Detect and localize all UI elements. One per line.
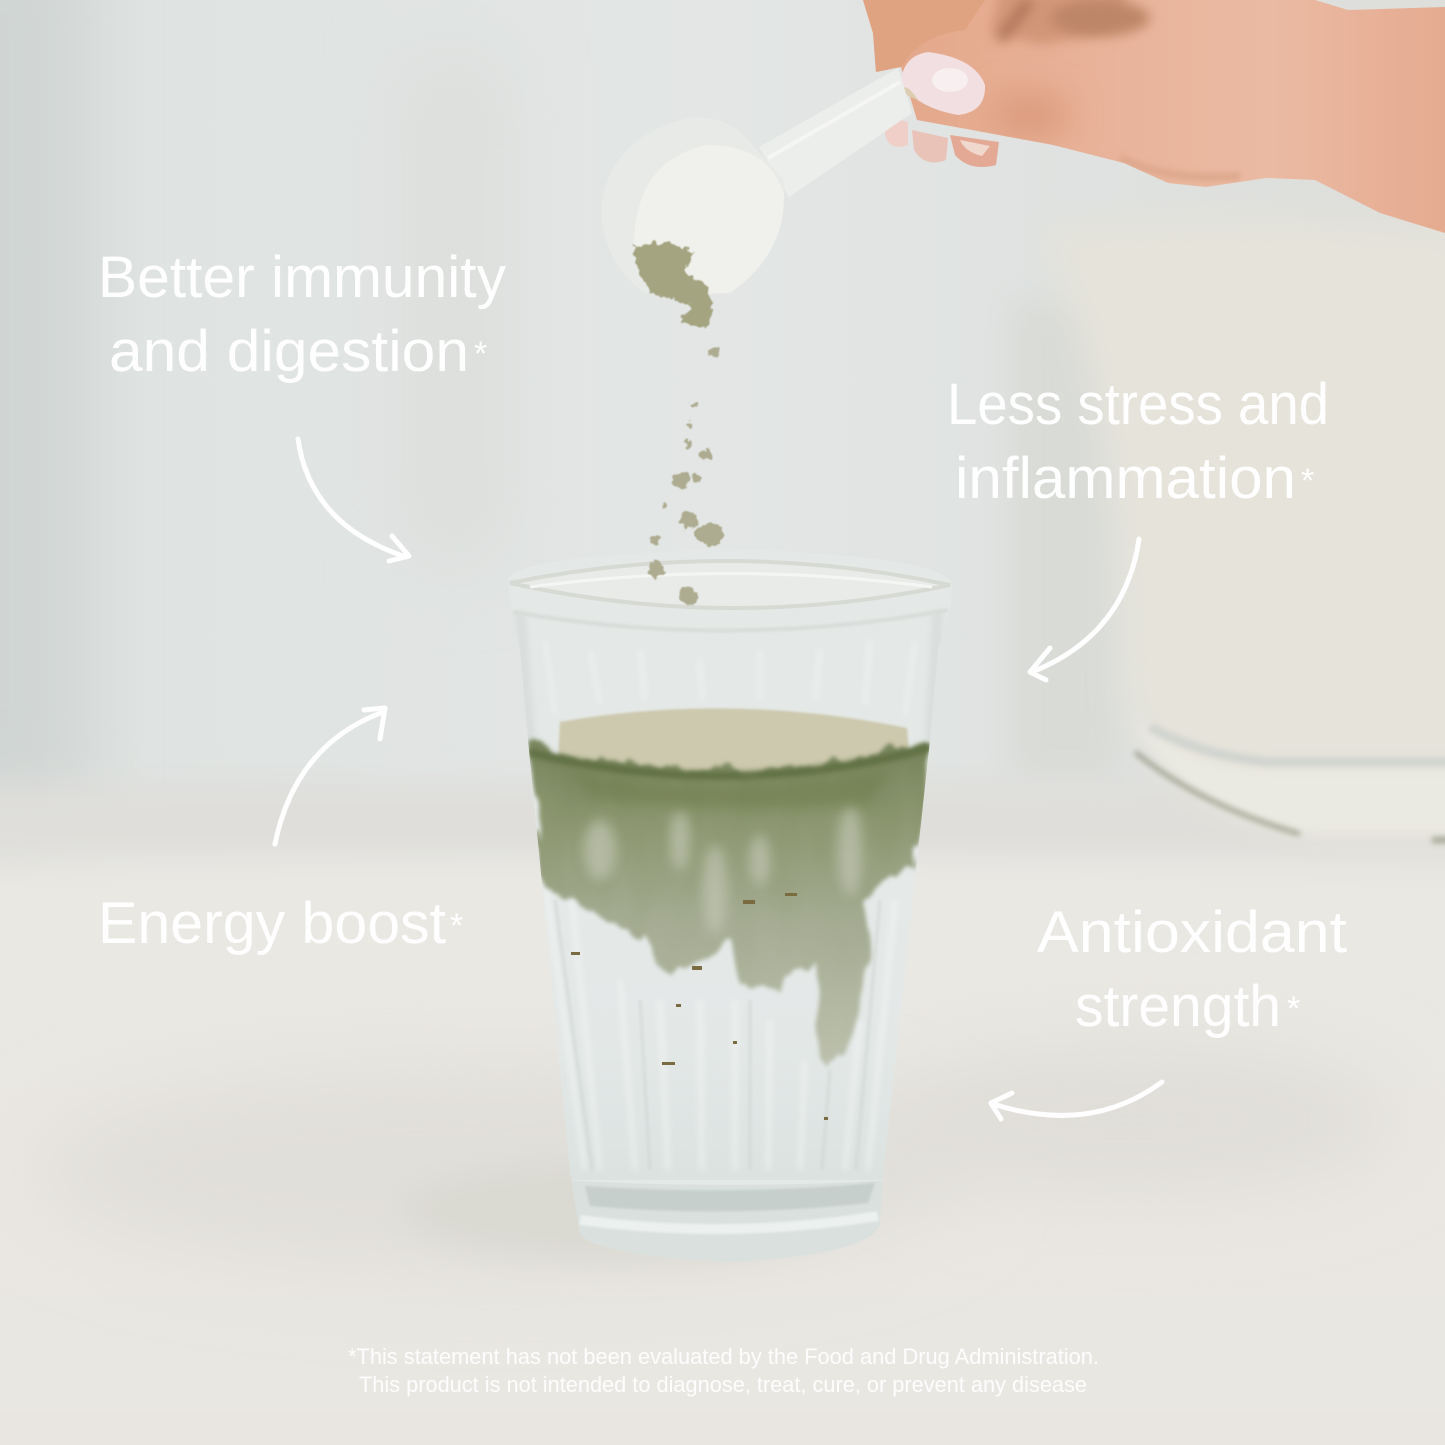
callout text: antioxidant strength (1037, 900, 1347, 1039)
callout text: energy boost: * (450, 907, 463, 945)
callout text: less stress and inflammation (947, 372, 1329, 511)
callout text: better immunity and digestion: and digestion (109, 319, 469, 384)
callout text: antioxidant strength: * (1287, 990, 1300, 1028)
glass of water with green powder (508, 549, 952, 1270)
hand holding the scoop (863, 0, 1445, 233)
appliance in background (1040, 219, 1445, 840)
falling powder (650, 347, 725, 573)
arrow: from antioxidant text to glass (991, 1082, 1162, 1119)
callout text: less stress and inflammation: inflammation (955, 446, 1296, 511)
disclaimer (348, 1344, 1099, 1397)
disclaimer: This product is not intended to diagnose, treat, cure, or prevent any disease (359, 1372, 1087, 1397)
arrow: from immunity text to glass (298, 439, 409, 561)
callout text: better immunity and digestion (98, 245, 506, 384)
callout text: better immunity and digestion: Better immunity (98, 245, 506, 310)
measuring scoop with powder (601, 68, 912, 328)
arrow: from energy text to glass (275, 708, 385, 844)
callout text: better immunity and digestion: * (474, 335, 487, 373)
callout text: antioxidant strength: strength (1075, 974, 1281, 1039)
callout text: antioxidant strength: Antioxidant (1037, 900, 1347, 965)
arrow: from stress text to glass (1030, 539, 1139, 680)
callout text: energy boost: Energy boost (98, 891, 446, 956)
callout text: less stress and inflammation: Less stress and (947, 372, 1329, 437)
disclaimer: *This statement has not been evaluated by the Food and Drug Administration. (348, 1344, 1099, 1369)
callout text: less stress and inflammation: * (1301, 462, 1314, 500)
falling powder in front of the rim (648, 525, 725, 605)
